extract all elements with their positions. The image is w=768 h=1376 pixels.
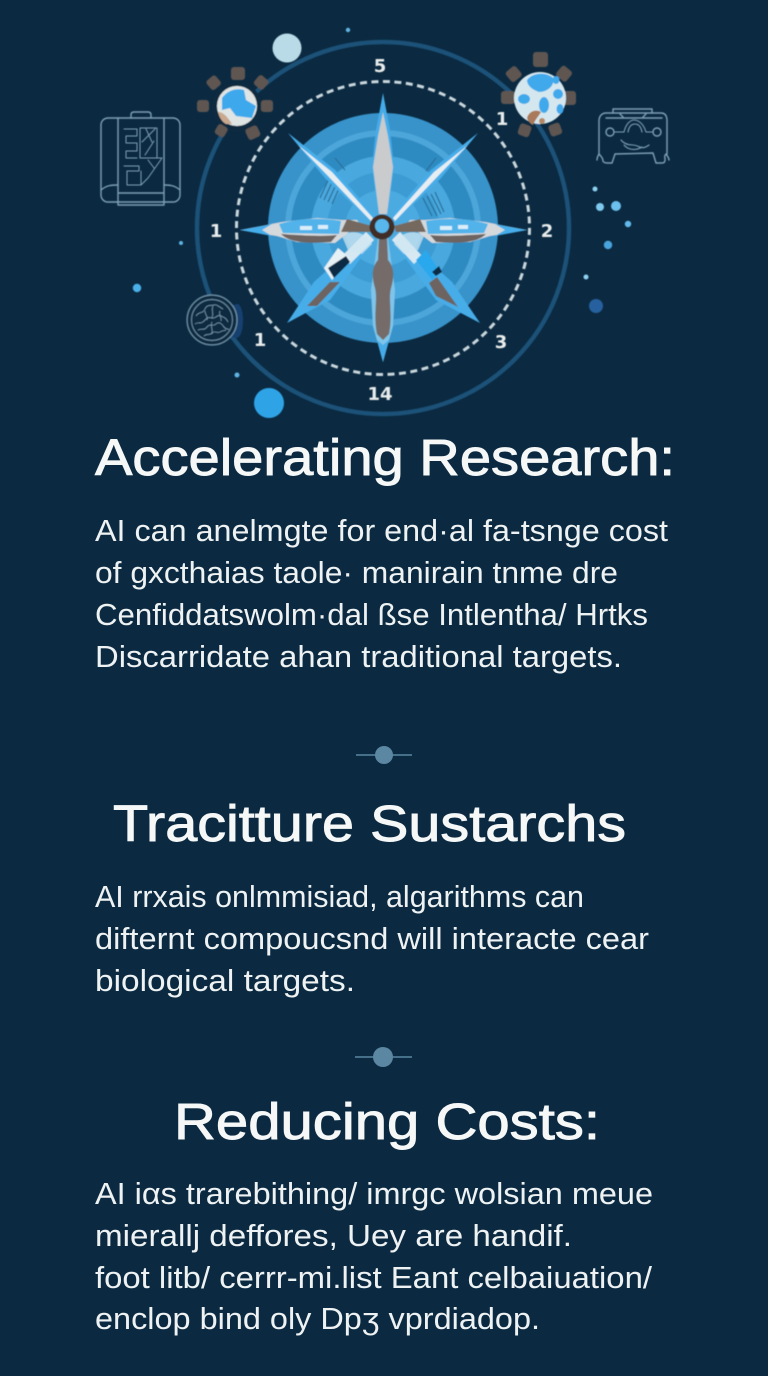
text block: first paragraph: Cenfiddatswolm·dal ßse Intlentha/ Hrtks <box>95 597 648 632</box>
heading: tracitture sustarchs: Tracitture Sustarchs <box>113 795 626 852</box>
icon: device <box>597 109 669 163</box>
compass illustration <box>101 28 669 418</box>
text block: first paragraph <box>95 513 668 674</box>
scale numbers: 2 <box>541 221 553 242</box>
text block: second paragraph: biological targets. <box>95 963 355 998</box>
heading: reducing costs: Reducing Costs: <box>174 1093 600 1150</box>
center hub <box>370 214 394 240</box>
text block: third paragraph <box>95 1176 653 1336</box>
scale numbers: 14 <box>367 384 393 405</box>
icon: brain circle <box>187 295 243 345</box>
scale numbers: 1 <box>496 109 508 130</box>
scale numbers <box>210 56 553 405</box>
text block: third paragraph: enclop bind oly Dpʒ vprdiadop. <box>95 1301 540 1336</box>
text block: third paragraph: mierallj deffores, Uey are handif. <box>95 1218 572 1253</box>
dashed inner ring <box>236 82 530 374</box>
disc hatch marks <box>320 158 444 216</box>
blade: bottom <box>371 238 395 362</box>
divider <box>355 1047 412 1067</box>
decorative orbs <box>133 28 631 418</box>
outer orbit ring <box>197 42 569 414</box>
blade: top <box>372 93 394 214</box>
scale numbers: 5 <box>374 56 386 77</box>
blade: lower right <box>392 232 480 323</box>
text block: second paragraph: difternt compoucsnd will interacte cear <box>95 921 649 956</box>
text block: first paragraph: of gxcthaias taole· manirain tnme dre <box>95 555 618 590</box>
text block: third paragraph: AI iαs trarebithing/ imrgc wolsian meue <box>95 1176 653 1211</box>
planet: upper left <box>197 67 273 141</box>
blade: lower left <box>287 232 374 323</box>
concentric blue disc <box>268 113 498 343</box>
text block: first paragraph: Discarridate ahan traditional targets. <box>95 639 622 674</box>
text block: second paragraph: AI rrxais onlmmisiad, algarithms can <box>95 879 584 914</box>
scale numbers: 1 <box>254 330 266 351</box>
scale numbers: 1 <box>210 221 222 242</box>
heading: accelerating research: Accelerating Research: <box>95 429 675 486</box>
blade: upper right <box>391 133 478 222</box>
icon: backpack <box>101 112 180 205</box>
text block: third paragraph: foot litb/ cerrr-mi.list Eant celbaiuation/ <box>95 1260 652 1295</box>
blade: left <box>240 218 372 243</box>
blade: right <box>394 218 527 243</box>
scale numbers: 3 <box>495 332 507 353</box>
blade: upper left <box>288 133 375 222</box>
divider <box>356 746 412 764</box>
planet: upper right <box>501 52 576 138</box>
text block: first paragraph: AI can anelmgte for end·al fa-tsnge cost <box>95 513 668 548</box>
text block: second paragraph <box>95 879 649 998</box>
